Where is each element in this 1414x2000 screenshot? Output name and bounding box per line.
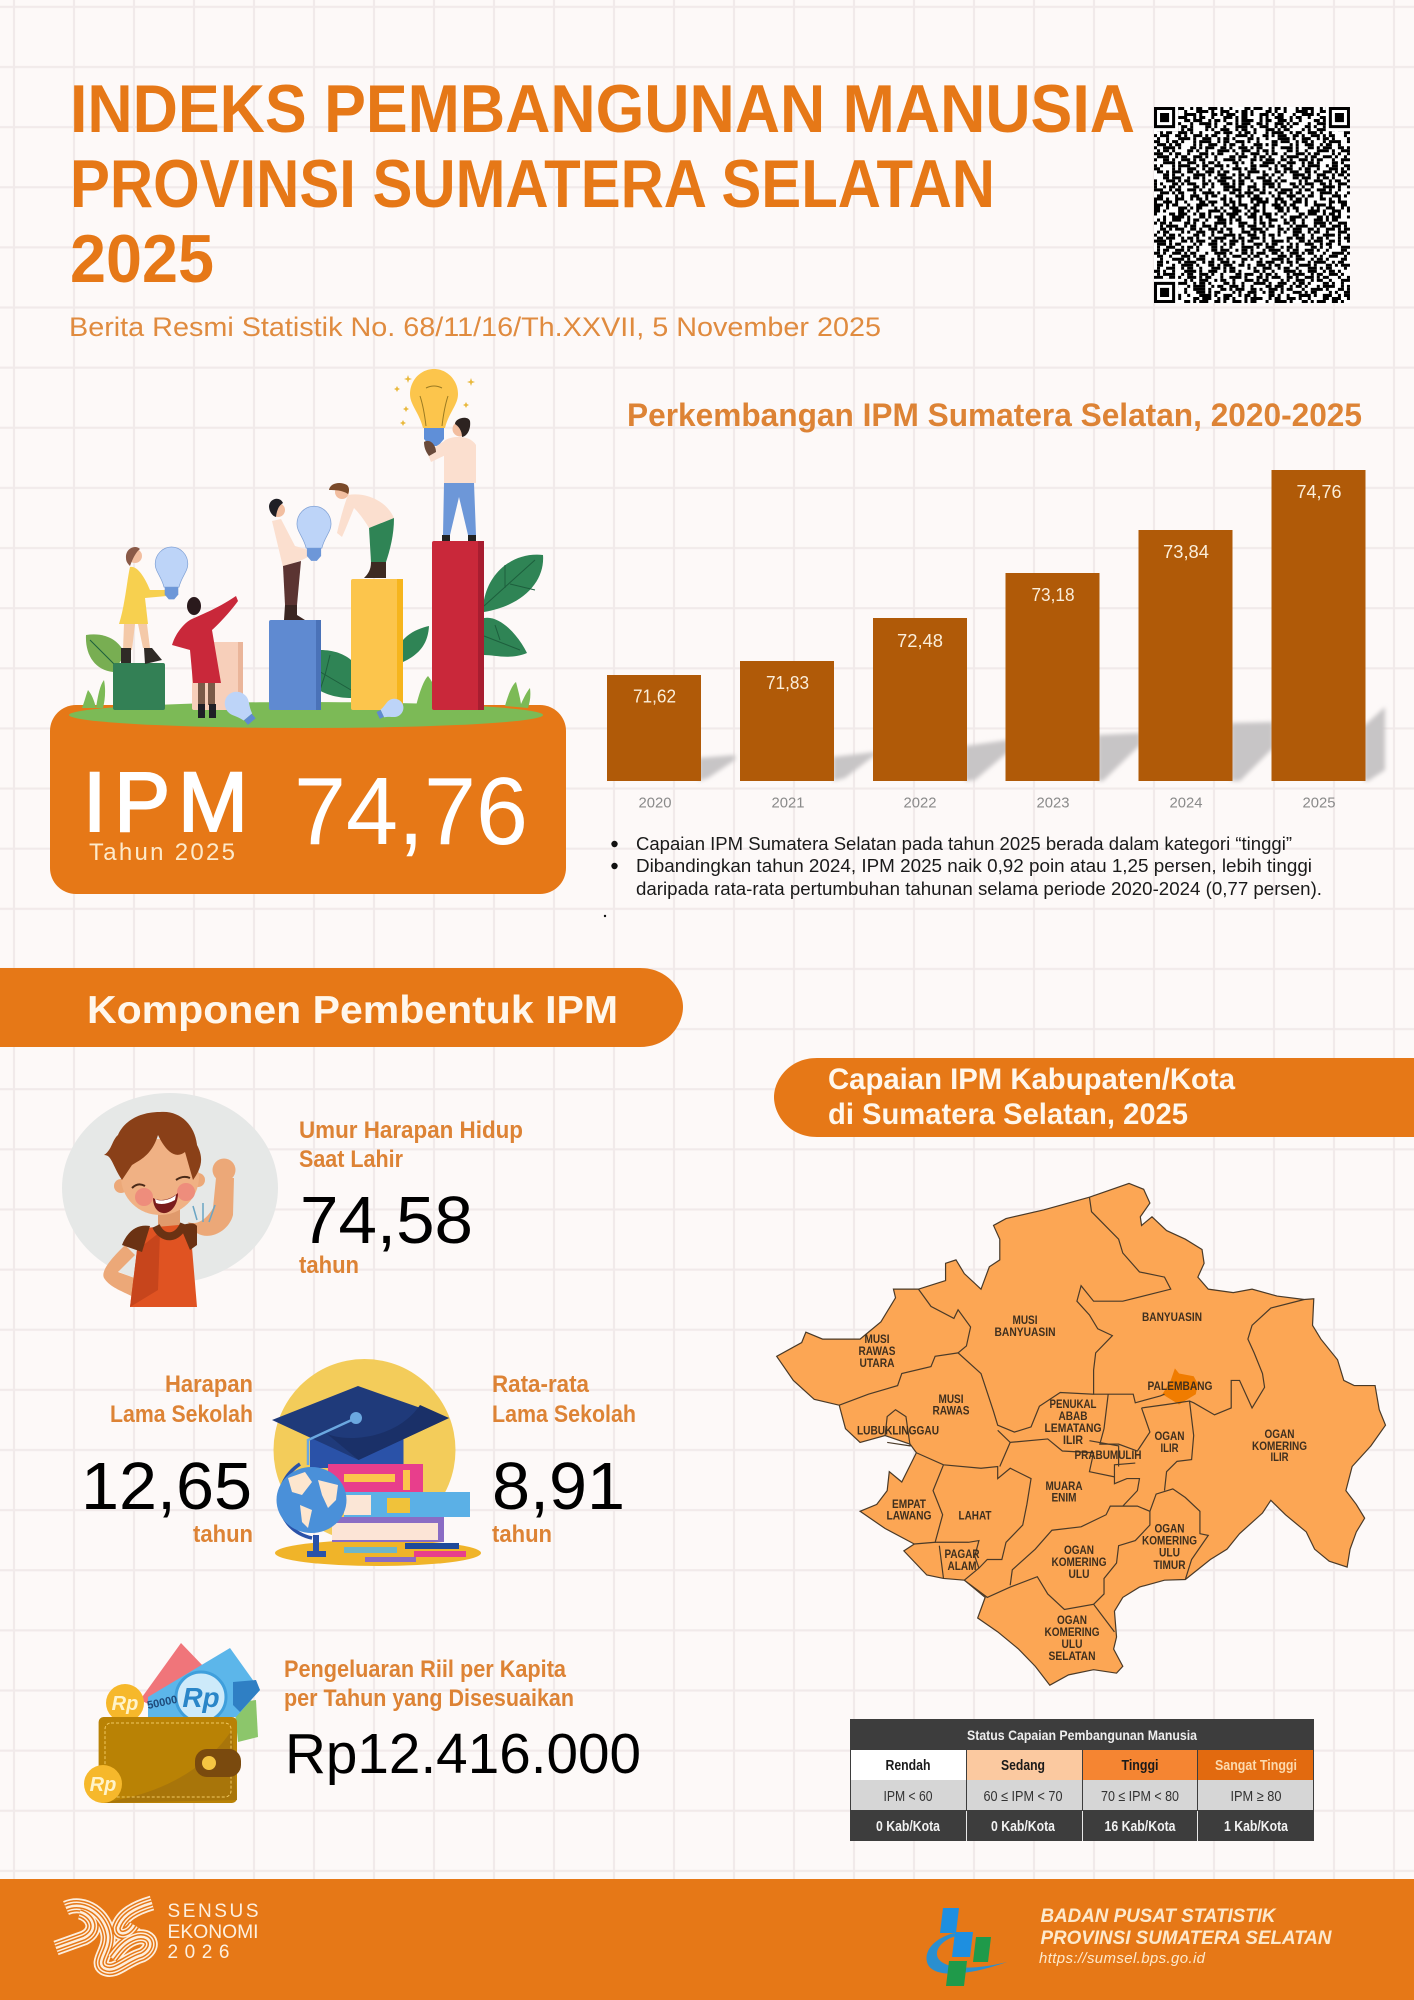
map labels: MUSI — [938, 1392, 964, 1406]
map labels: ABAB — [1058, 1409, 1088, 1423]
map labels: LEMATANG — [1044, 1421, 1102, 1435]
map labels: RAWAS — [932, 1404, 970, 1418]
text: Badan Pusat Statistik: PROVINSI SUMATERA SELATAN — [1040, 1928, 1333, 1949]
stat: Umur Harapan Hidup: 74,58 — [300, 1183, 473, 1258]
IPM headline card: IPM — [83, 755, 248, 849]
table: status capaian pembangunan manusia: Sedang — [1001, 1758, 1045, 1774]
stat: Pengeluaran Riil per Kapita — [284, 1656, 641, 1786]
text: Badan Pusat Statistik: BADAN PUSAT STATISTIK — [1040, 1906, 1277, 1927]
text: Sensus Ekonomi 2026: SENSUS — [168, 1901, 258, 1922]
person: woman in yellow dress — [119, 547, 168, 664]
bar chart: IPM 2020-2025 — [607, 470, 1385, 812]
map labels: ENIM — [1052, 1490, 1077, 1504]
stat: Pengeluaran Riil per Kapita: Rp12.416.000 — [285, 1722, 641, 1786]
bar chart: IPM 2020-2025: 2021 — [772, 794, 804, 812]
icon: wallet with banknotes and coins: Rp — [90, 1774, 116, 1796]
map labels: OGAN — [1057, 1613, 1087, 1627]
bar chart: IPM 2020-2025: 2022 — [904, 794, 936, 812]
map labels: EMPAT — [892, 1497, 927, 1511]
bar chart: IPM 2020-2025: 2020 — [638, 794, 672, 812]
text block: key findings: Dibandingkan tahun 2024, IPM 2025 naik 0,92 poin atau 1,25 persen, lebih tinggi — [636, 856, 1312, 876]
icon: happy boy flexing arm — [62, 1093, 278, 1307]
map labels: OGAN — [1264, 1427, 1294, 1441]
map labels: SELATAN — [1048, 1649, 1096, 1663]
icon: wallet with banknotes and coins: 50000 — [146, 1694, 179, 1712]
IPM headline card: Tahun 2025 — [89, 839, 235, 866]
icon: graduation cap, books and globe — [272, 1359, 481, 1566]
stat: Rata-rata Lama Sekolah: Lama Sekolah — [492, 1401, 636, 1428]
section heading: Komponen Pembentuk IPM — [0, 968, 683, 1047]
IPM headline card — [50, 705, 566, 894]
icon: Sensus Ekonomi logo — [56, 1903, 152, 1969]
person: man leaning over bulb — [329, 483, 394, 578]
stat: Umur Harapan Hidup: Umur Harapan Hidup — [299, 1117, 523, 1144]
IPM headline card: 74,76 — [294, 758, 528, 865]
map labels: PENUKAL — [1050, 1397, 1096, 1411]
text: Badan Pusat Statistik: https://sumsel.bps.go.id — [1039, 1950, 1206, 1967]
title: 2025 — [70, 221, 214, 297]
bar chart: IPM 2020-2025: 74,76 — [1296, 482, 1342, 502]
text: Sensus Ekonomi 2026: 2026 — [168, 1942, 230, 1963]
map labels: OGAN — [1154, 1429, 1184, 1443]
stat: Umur Harapan Hidup: Saat Lahir — [299, 1146, 403, 1173]
map labels: BANYUASIN — [994, 1325, 1056, 1339]
bar chart: IPM 2020-2025: 71,83 — [766, 673, 809, 693]
map labels: ILIR — [1160, 1441, 1179, 1455]
map labels: ILIR — [1270, 1450, 1289, 1464]
subtitle: publication reference: Berita Resmi Statistik No. 68/11/16/Th.XXVII, 5 November 2025 — [69, 312, 881, 342]
map labels: KOMERING — [1142, 1534, 1197, 1548]
map labels: UTARA — [860, 1356, 895, 1370]
map labels: MUARA — [1046, 1479, 1083, 1493]
grass tufts — [82, 676, 530, 708]
map labels: ULU — [1159, 1546, 1180, 1560]
stat: Harapan Lama Sekolah: Harapan — [165, 1371, 253, 1398]
table: status capaian pembangunan manusia: Tinggi — [1122, 1758, 1158, 1774]
bar chart: IPM 2020-2025: 2025 — [1302, 794, 1336, 812]
map labels: BANYUASIN — [1142, 1310, 1202, 1324]
map labels: ULU — [1068, 1567, 1090, 1581]
table: status capaian pembangunan manusia: 16 Kab/Kota — [1104, 1819, 1176, 1835]
table: status capaian pembangunan manusia: 1 Kab/Kota — [1224, 1819, 1289, 1835]
stat: Rata-rata Lama Sekolah: tahun — [492, 1521, 552, 1548]
map labels: OGAN — [1154, 1522, 1184, 1536]
bar chart: IPM 2020-2025: 72,48 — [897, 631, 943, 651]
table: status capaian pembangunan manusia: Sangat Tinggi — [1215, 1758, 1297, 1774]
icon: wallet with banknotes and coins: Rp — [112, 1693, 138, 1715]
bar chart: IPM 2020-2025: 73,18 — [1032, 585, 1074, 605]
table: status capaian pembangunan manusia — [850, 1719, 1314, 1841]
text: Sensus Ekonomi 2026 — [168, 1901, 258, 1963]
map labels: MUSI — [864, 1332, 890, 1346]
stat: Umur Harapan Hidup — [299, 1117, 523, 1279]
stat: Pengeluaran Riil per Kapita: per Tahun yang Disesuaikan — [284, 1685, 574, 1712]
section heading: Komponen Pembentuk IPM: Komponen Pembentuk IPM — [87, 989, 618, 1032]
icon: BPS logo — [927, 1908, 1007, 1986]
illustration: people raising light bulbs on bars — [50, 369, 566, 894]
icon: bulbs on ground — [220, 687, 406, 729]
map: IPM kabupaten/kota Sumatera Selatan — [777, 1183, 1386, 1685]
icon: wallet with banknotes and coins: Rp — [182, 1682, 220, 1713]
stat: Umur Harapan Hidup: tahun — [299, 1252, 359, 1279]
map labels: RAWAS — [858, 1344, 896, 1358]
footer band — [0, 1879, 1414, 2000]
bar chart: IPM 2020-2025: 2024 — [1170, 794, 1202, 812]
table: status capaian pembangunan manusia: Status Capaian Pembangunan Manusia — [967, 1727, 1197, 1743]
icon: QR code — [1154, 107, 1350, 303]
map labels: KOMERING — [1252, 1439, 1307, 1453]
map labels: OGAN — [1064, 1543, 1094, 1557]
chart heading: Perkembangan IPM Sumatera Selatan, 2020-2025 — [627, 397, 1362, 433]
map labels: ULU — [1062, 1637, 1082, 1651]
stat: Harapan Lama Sekolah — [81, 1371, 253, 1548]
bar chart: IPM 2020-2025: 2023 — [1036, 794, 1070, 812]
map labels: MUSI — [1012, 1313, 1038, 1327]
title: PROVINSI SUMATERA SELATAN — [70, 146, 995, 222]
section heading: Capaian IPM Kabupaten/Kota: di Sumatera Selatan, 2025 — [828, 1098, 1188, 1131]
text block: key findings — [604, 834, 1322, 917]
text block: key findings: daripada rata-rata pertumbuhan tahunan selama periode 2020-2024 (0,77 persen). — [636, 879, 1322, 899]
text: Sensus Ekonomi 2026: EKONOMI — [168, 1922, 258, 1943]
map labels: LUBUKLINGGAU — [857, 1424, 939, 1438]
stat: Harapan Lama Sekolah: tahun — [193, 1521, 253, 1548]
map labels: KOMERING — [1044, 1625, 1100, 1639]
person: woman in red dress — [172, 596, 238, 718]
text: Badan Pusat Statistik — [1039, 1906, 1333, 1967]
map labels: TIMUR — [1154, 1558, 1186, 1572]
table: status capaian pembangunan manusia: IPM ≥ 80 — [1230, 1789, 1282, 1805]
table: status capaian pembangunan manusia: 60 ≤ IPM < 70 — [984, 1789, 1062, 1805]
title — [70, 71, 1135, 297]
title: INDEKS PEMBANGUNAN MANUSIA — [70, 71, 1135, 147]
table: status capaian pembangunan manusia: 70 ≤ IPM < 80 — [1101, 1789, 1179, 1805]
stat: Rata-rata Lama Sekolah — [492, 1371, 636, 1548]
map labels — [857, 1310, 1307, 1663]
section heading: Capaian IPM Kabupaten/Kota — [774, 1058, 1414, 1137]
icon: wallet with banknotes and coins — [84, 1643, 260, 1803]
map labels: ILIR — [1063, 1433, 1083, 1447]
stat: Rata-rata Lama Sekolah: 8,91 — [492, 1449, 625, 1524]
stat: Harapan Lama Sekolah: Lama Sekolah — [110, 1401, 253, 1428]
table: status capaian pembangunan manusia: Rendah — [886, 1758, 930, 1774]
icon: blue bulb on the left — [155, 547, 188, 599]
map labels: PAGAR — [944, 1547, 980, 1561]
stat: Pengeluaran Riil per Kapita: Pengeluaran Riil per Kapita — [284, 1656, 567, 1683]
stat: Harapan Lama Sekolah: 12,65 — [81, 1449, 252, 1524]
person: man holding big bulb — [394, 369, 476, 541]
table: status capaian pembangunan manusia: 0 Kab/Kota — [876, 1819, 941, 1835]
map labels: KOMERING — [1052, 1555, 1106, 1569]
map labels: PALEMBANG — [1148, 1379, 1212, 1393]
table: status capaian pembangunan manusia: 0 Kab/Kota — [991, 1819, 1056, 1835]
icon: blue bulb in the middle — [297, 506, 331, 561]
map labels: PRABUMULIH — [1074, 1448, 1142, 1462]
table: status capaian pembangunan manusia: IPM < 60 — [884, 1789, 932, 1805]
map labels: ALAM — [948, 1559, 976, 1573]
map labels: LAHAT — [958, 1508, 992, 1522]
bar chart: IPM 2020-2025: 73,84 — [1163, 542, 1209, 562]
bar chart: IPM 2020-2025: 71,62 — [633, 686, 676, 706]
map labels: LAWANG — [886, 1508, 932, 1522]
stat: Rata-rata Lama Sekolah: Rata-rata — [492, 1371, 590, 1398]
bars — [113, 663, 165, 710]
section heading: Capaian IPM Kabupaten/Kota: Capaian IPM Kabupaten/Kota — [828, 1063, 1235, 1096]
text block: key findings: Capaian IPM Sumatera Selatan pada tahun 2025 berada dalam kategori “tinggi” — [636, 834, 1292, 854]
person: man holding blue bulb — [269, 499, 312, 620]
